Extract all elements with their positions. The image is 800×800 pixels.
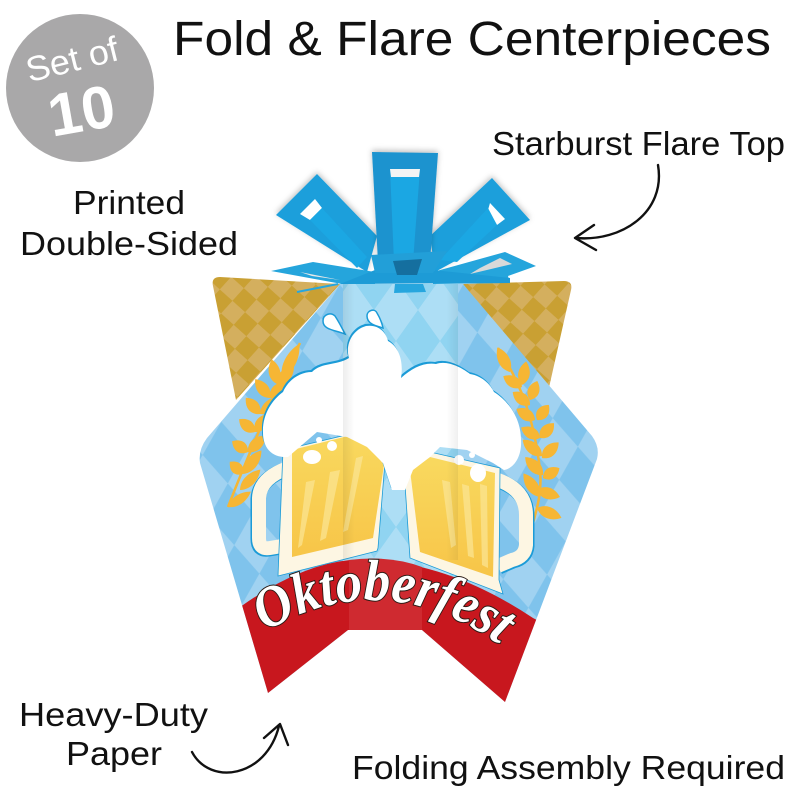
right mug bubbles xyxy=(454,452,486,482)
label: printed double-sided: Printed xyxy=(73,184,185,221)
label: folding assembly required: Folding Assembly Required xyxy=(352,749,785,786)
red banner xyxy=(242,560,536,702)
starburst flare top xyxy=(271,152,536,293)
laurel: right wheat xyxy=(492,345,564,523)
label: heavy-duty paper xyxy=(19,696,209,772)
badge: set of 10 xyxy=(6,14,154,162)
foam droplets xyxy=(323,310,383,334)
laurel: left wheat xyxy=(225,341,305,511)
badge: set of 10: 10 xyxy=(43,72,120,150)
left mug bubbles xyxy=(303,437,337,464)
banner text: Oktoberfest: Oktoberfest xyxy=(255,558,518,644)
label: starburst flare top: Starburst Flare Top xyxy=(492,125,785,162)
tab xyxy=(394,284,426,293)
base strip xyxy=(340,270,510,284)
arrow: to starburst xyxy=(575,165,659,250)
arrow: to paper xyxy=(192,724,288,773)
left blade xyxy=(276,174,377,272)
label: heavy-duty paper: Heavy-Duty xyxy=(19,696,209,733)
center blade xyxy=(372,152,438,262)
badge: set of 10: Set of xyxy=(22,29,123,90)
fold shading on center panel xyxy=(343,284,458,560)
label: printed double-sided: Double-Sided xyxy=(20,225,238,262)
low flares xyxy=(271,262,375,284)
beer foam xyxy=(262,310,521,490)
left beer mug xyxy=(258,425,388,576)
title: Fold & Flare Centerpieces xyxy=(173,13,771,66)
label: heavy-duty paper: Paper xyxy=(66,735,162,772)
label: printed double-sided xyxy=(20,184,238,262)
right blade xyxy=(430,178,530,272)
centerpiece: blue front panel xyxy=(190,280,610,720)
center trapezoid xyxy=(371,251,447,273)
right beer mug xyxy=(404,452,527,594)
centerpiece: gold back panels xyxy=(213,277,571,400)
